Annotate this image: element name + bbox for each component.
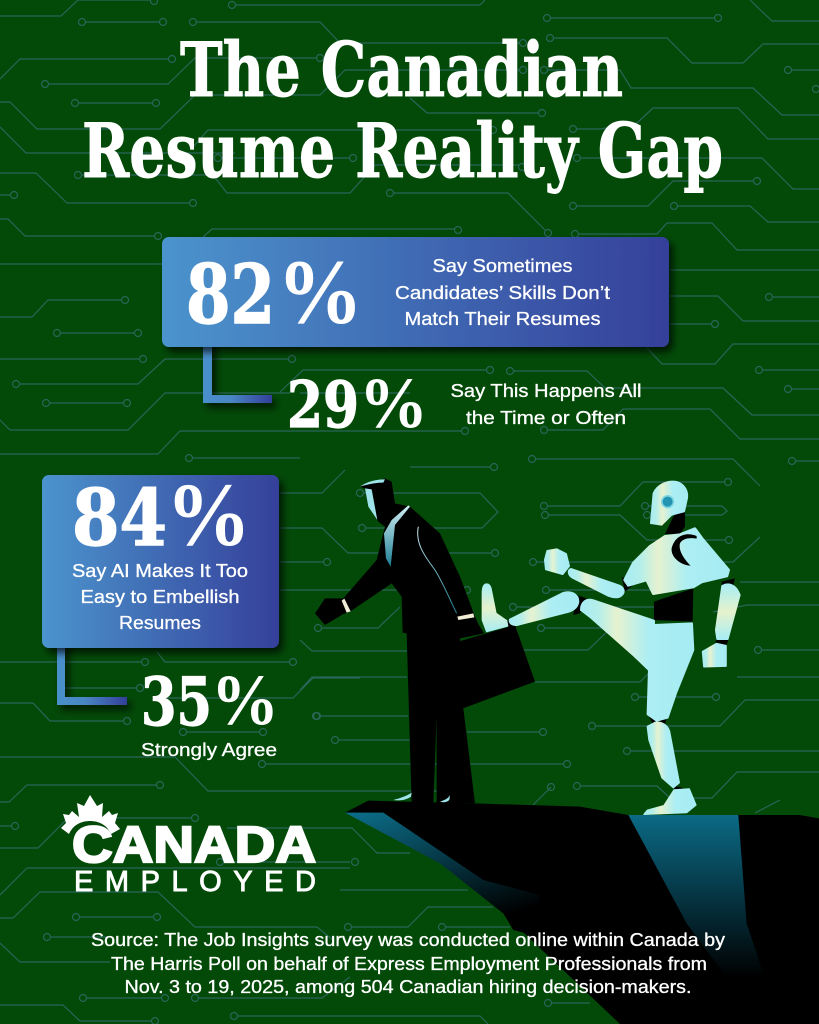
raised leg thigh and hip — [581, 600, 693, 721]
shoulder crescent — [672, 534, 697, 566]
illustration: businessman with briefcase — [315, 478, 535, 803]
source note: Nov. 3 to 19, 2025, among 504 Canadian hiring decision-makers. — [124, 977, 692, 997]
panel: 84 percent callout: 84 — [72, 473, 167, 564]
logo: Canada Employed: CANADA — [72, 816, 316, 873]
stat: 35 percent: Strongly Agree — [141, 740, 277, 760]
panel: 82 percent callout: % — [277, 241, 363, 343]
torso — [625, 529, 729, 594]
rear arm — [716, 584, 740, 639]
head — [651, 481, 687, 525]
stat: 29 percent: % — [359, 363, 428, 443]
illustration: cliff — [345, 801, 819, 1024]
panel: 84 percent callout: Resumes — [119, 612, 201, 633]
stat: 35 percent: 35 — [141, 663, 212, 741]
stat: 29 percent: Say This Happens All — [450, 381, 642, 401]
suit highlights — [360, 479, 385, 520]
man silhouette — [315, 478, 484, 803]
title: The Canadian — [180, 26, 623, 114]
panel: 82 percent callout: Candidates’ Skills Don’t — [395, 282, 610, 303]
raised foot — [482, 584, 508, 632]
source note — [91, 930, 725, 997]
front fist — [545, 549, 569, 574]
stat: 29 percent: 29 — [287, 368, 359, 443]
standing lower leg — [648, 722, 679, 787]
logo: Canada Employed — [61, 795, 316, 898]
source note: The Harris Poll on behalf of Express Employment Professionals from — [111, 954, 707, 974]
panel: 82 percent callout: 82 — [186, 248, 275, 343]
panel: 84 percent callout: Say AI Makes It Too — [72, 560, 248, 581]
stat: 29 percent — [287, 363, 642, 443]
raised shin — [510, 593, 578, 625]
eye — [661, 495, 674, 508]
source note: Source: The Job Insights survey was conducted online within Canada by — [91, 930, 725, 950]
stat: 29 percent: the Time or Often — [466, 408, 626, 428]
icon: maple leaf — [61, 795, 120, 834]
briefcase — [458, 625, 535, 708]
stat: 35 percent: % — [211, 660, 279, 740]
panel: 84 percent callout: Easy to Embellish — [80, 586, 240, 607]
rear fist — [703, 644, 726, 667]
stat: 35 percent — [141, 660, 279, 760]
connector: 84% to 35% — [57, 640, 127, 705]
panel: 84 percent callout: % — [166, 466, 251, 565]
connector: 82% to 29% — [203, 340, 272, 403]
panel: 82 percent callout: Match Their Resumes — [404, 308, 600, 329]
logo: Canada Employed: EMPLOYED — [74, 866, 316, 898]
panel: 84 percent callout — [42, 466, 279, 648]
illustration: robot kicking — [482, 481, 740, 814]
panel: 82 percent callout: Say Sometimes — [432, 255, 572, 276]
standing foot — [644, 789, 696, 814]
panel: 82 percent callout — [162, 237, 669, 347]
robot joints — [507, 511, 735, 792]
front arm — [569, 569, 623, 597]
title — [82, 26, 723, 195]
